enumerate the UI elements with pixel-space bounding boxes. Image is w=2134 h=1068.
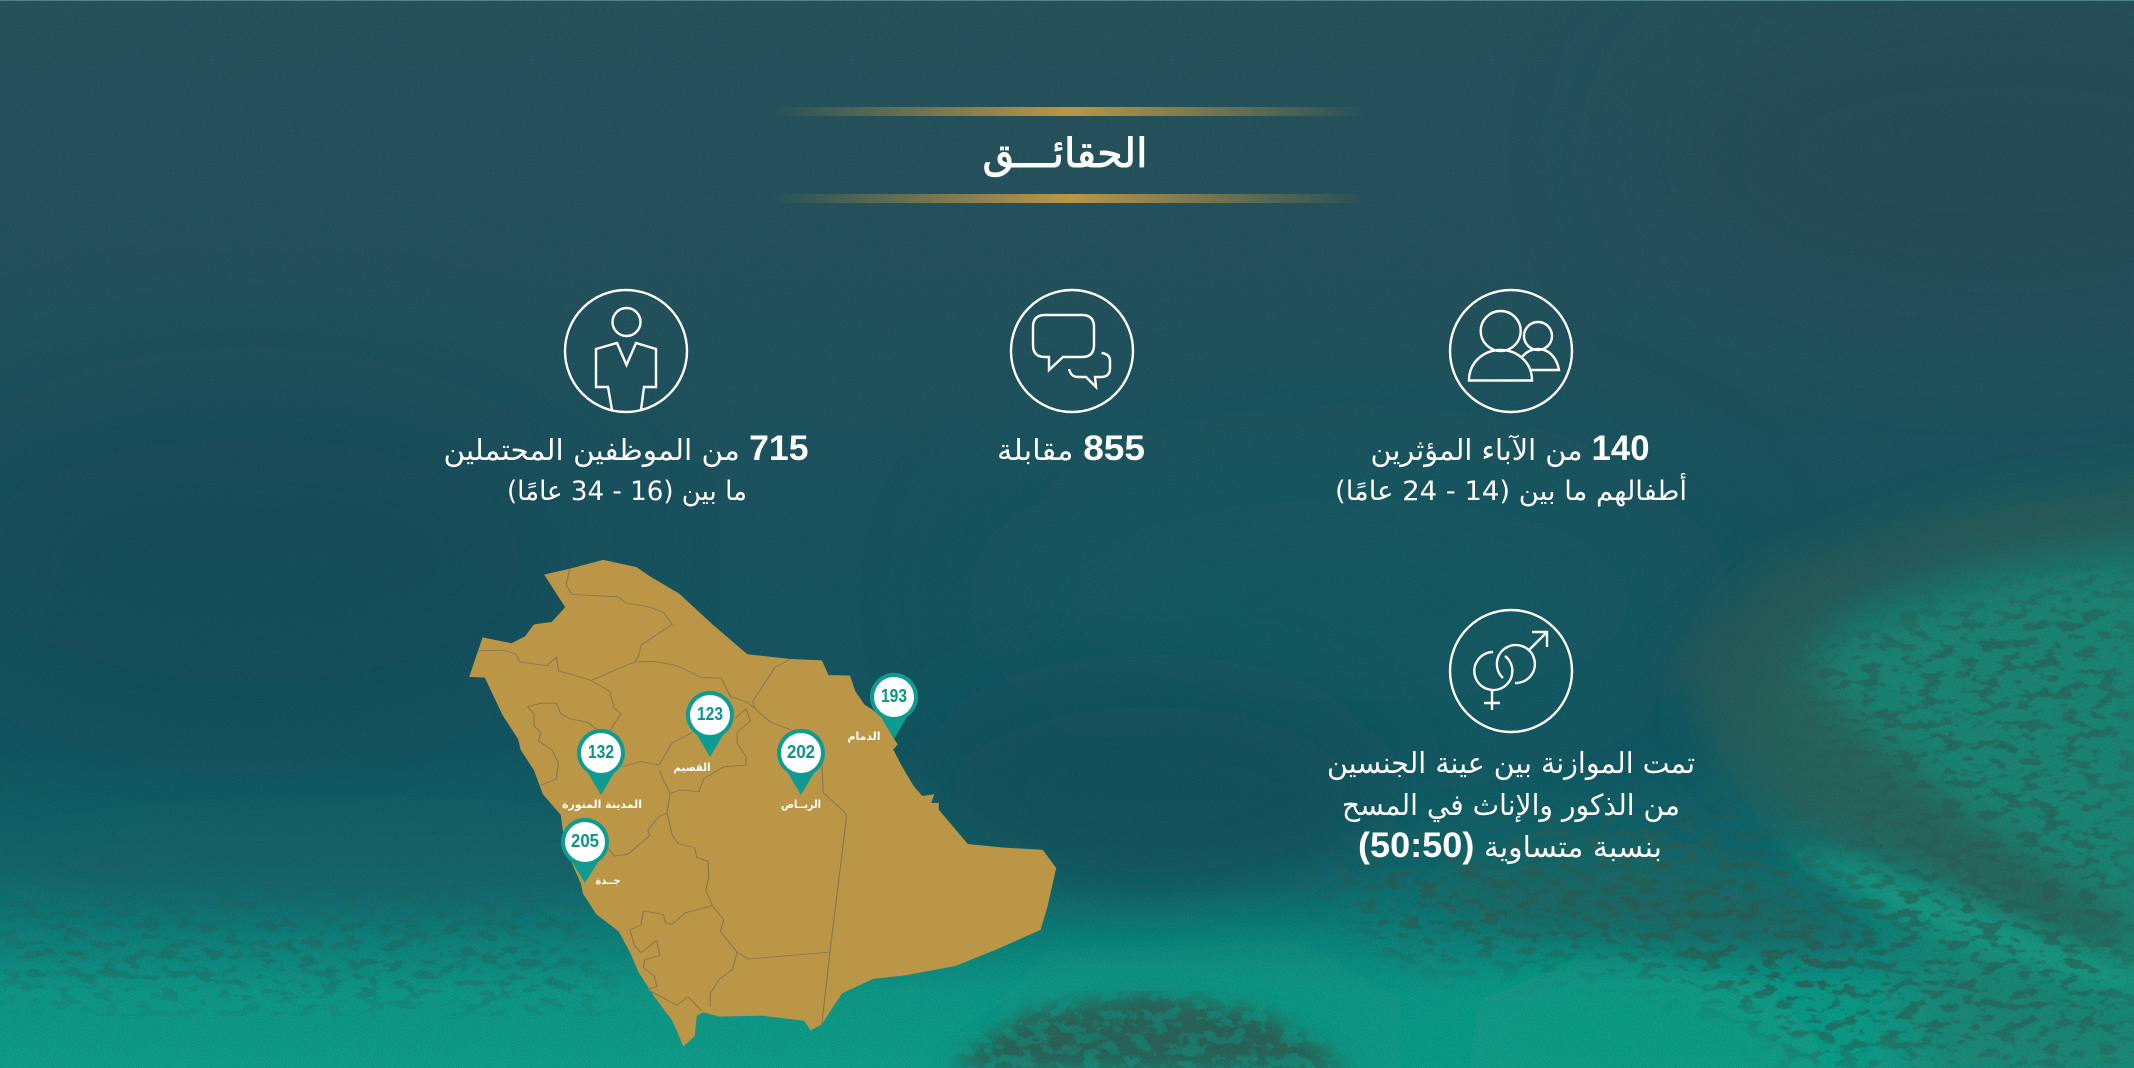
pin: Dammam 193: 193 (881, 686, 907, 706)
text: 140 parents: 140 من الآباء المؤثرين (1370, 429, 1650, 468)
title block (772, 107, 1366, 203)
pin: Riyadh 202: الريــاض (781, 798, 821, 811)
text: age range 16-34: ما بين (16 - 34 عامًا) (507, 476, 747, 507)
title block: الحقائـــق (982, 131, 1148, 177)
icon: gender symbols (1450, 610, 1572, 732)
text: gender balance: تمت الموازنة بين عينة الجنسين (1327, 746, 1695, 780)
stat: gender balance (1327, 610, 1695, 865)
stat: interviews (997, 290, 1145, 468)
pin: Dammam 193: الدمام (848, 730, 880, 743)
pin: Qassim 123: القصيم (674, 761, 710, 774)
pin: Jeddah 205 (561, 818, 620, 887)
icon: speech bubbles (1011, 290, 1133, 412)
pin: Qassim 123 (674, 691, 734, 774)
stat: parents (1335, 290, 1687, 507)
text: children age 14-24: أطفالهم ما بين (14 - 24 عامًا) (1335, 472, 1687, 507)
pin: Madinah 132: المدينة المنورة (562, 798, 642, 811)
pin: Jeddah 205: جــدة (596, 874, 620, 887)
icon: two people (1450, 290, 1572, 412)
icon: employee (565, 290, 687, 412)
pin: Riyadh 202 (777, 729, 825, 811)
text: 855 interviews: 855 مقابلة (997, 429, 1145, 468)
pin: Dammam 193 (848, 673, 918, 743)
map of Saudi Arabia (469, 560, 1056, 1047)
map shape with region borders (469, 560, 1056, 1047)
text: gender balance: من الذكور والإناث في المسح (1342, 788, 1680, 823)
pin: Qassim 123: 123 (697, 704, 723, 724)
pin: Madinah 132 (562, 729, 642, 811)
text: gender balance: بنسبة متساوية (50:50) (1358, 826, 1662, 865)
pin: Madinah 132: 132 (588, 742, 614, 762)
pin: Jeddah 205: 205 (571, 831, 599, 851)
text: 715 potential employees: 715 من الموظفين المحتملين (443, 429, 808, 468)
text: gender balance (1327, 746, 1695, 865)
pin: Riyadh 202: 202 (787, 742, 815, 762)
stat: potential employees (443, 290, 808, 507)
